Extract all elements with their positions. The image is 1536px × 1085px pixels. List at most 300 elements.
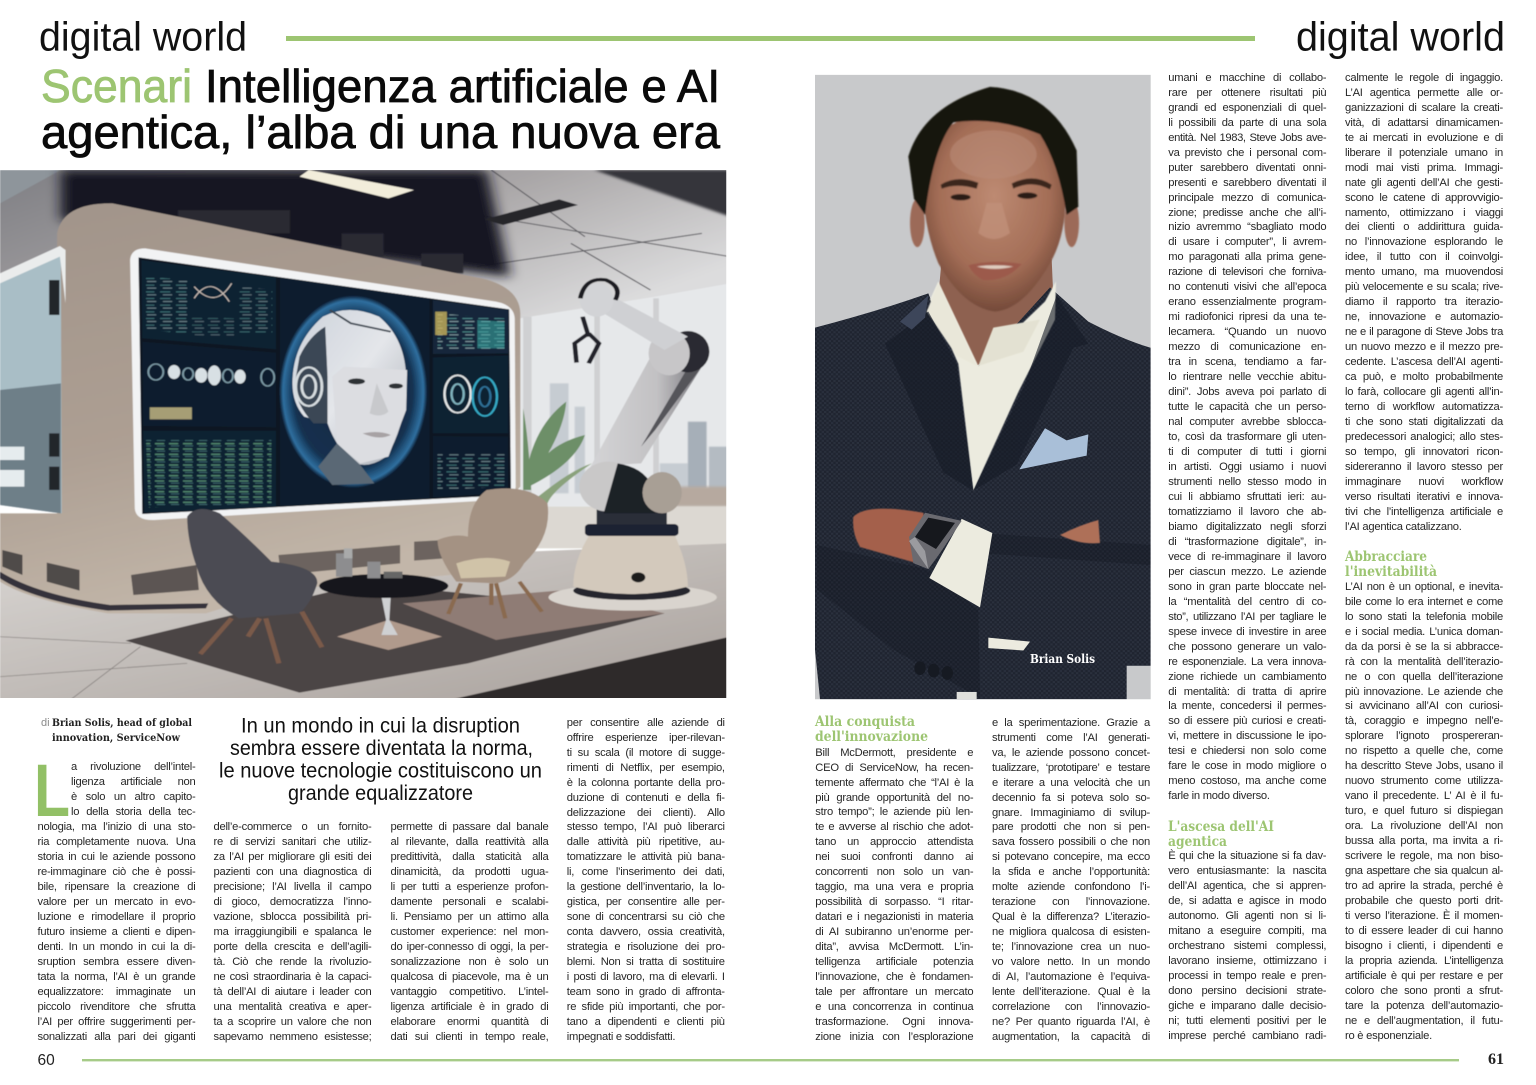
text block: column 8: ne e dell’augmentation, il futu- (1345, 1015, 1503, 1027)
text block: column 4: sone di concentrarsi su ciò che (567, 911, 725, 923)
text block: column 4: team sono in grado di affronta- (567, 986, 725, 998)
text block: column 8: so tempo, gli innovatori ricon- (1345, 446, 1503, 458)
text block: column 8: ca può, e molto probabilmente (1345, 371, 1503, 383)
green header rule (286, 36, 1255, 41)
text block: column 8: vano il precedente. L’ AI è il fu- (1345, 790, 1503, 802)
text block: column 1 intro: piccolo rivenditore che sfrutta (38, 1001, 196, 1013)
text block: column 1 intro: valore per un mercato in evo- (38, 896, 196, 908)
text block: column 7: spese invece di investire in aree (1168, 626, 1326, 638)
text block: column 4: delizzazione dei clienti). Allo (567, 806, 725, 818)
floor tile lines (0, 637, 187, 700)
text block: column 4: la gestione dell’inventario, la lo- (567, 881, 725, 893)
left hand (853, 509, 925, 563)
window with skyline (519, 283, 730, 547)
text block: column 7: fare le cose in modo migliore o (1168, 760, 1326, 772)
text block: column 6: vo valore netto. In un mondo (992, 956, 1150, 968)
screen glow frame (130, 248, 516, 520)
byline (41, 717, 192, 744)
text block: column 2: vazione, sblocca possibilità pri- (214, 911, 372, 923)
text block: column 7: in artisti. Oggi usiamo i nuovi (1168, 461, 1326, 473)
text block: column 7: farle in modo diverso. (1168, 790, 1270, 802)
text block: column 6: strumenti come l’AI generati- (992, 732, 1150, 744)
text block: column 7: ni; tutti elementi positivi per le (1168, 1015, 1326, 1027)
text block: column 7: giche e imparano dalle decisio- (1168, 1000, 1326, 1012)
text block: column 4: strategia e risoluzione dei pro- (567, 941, 725, 953)
unit base shadow and vents (0, 572, 208, 611)
text block: column 3 (390, 821, 549, 1043)
text block: column 1 intro: lo della storia della tec- (71, 806, 196, 818)
face (923, 112, 1066, 312)
eyes (951, 192, 1037, 200)
text block: column 1 intro: è solo un altro capito- (71, 791, 196, 803)
text block: column 2: di gioco, democratizza l’inno- (214, 896, 372, 908)
text block: column 8: probabile che questo porti drit- (1345, 895, 1503, 907)
text block: column 4: tano a dipendenti e clienti più (567, 1016, 725, 1028)
text block: column 3: ligenza artificiale è in grado di (390, 1001, 548, 1013)
text block: column 7: la “mentalità del centro di co- (1168, 596, 1326, 608)
text block: column 8: ora. La rivoluzione dell’AI non (1345, 820, 1503, 832)
text block: column 4: blemi. Non si tratta di sostituire (567, 956, 725, 968)
text block: column 6 (992, 717, 1150, 1043)
text block: column 8: gna aspettare che sia qualcun al- (1345, 865, 1503, 877)
drop cap: L (34, 749, 70, 832)
sleeve buttons (914, 661, 953, 680)
text block: column 7: sono in gran parte bloccate nel- (1168, 581, 1326, 593)
pocket square (1019, 428, 1088, 469)
text block: column 1 intro: nologia, ma l’inizio di una sto- (38, 821, 196, 833)
digital world heading left: digital world (39, 14, 247, 60)
text block: column 7: re esponenziale. La vera innova- (1168, 656, 1326, 668)
text block: column 1 intro: denti. In un mondo in cui la di- (38, 941, 196, 953)
section heading: Abbracciare l'inevitabilità (1344, 549, 1437, 580)
head group (908, 87, 1079, 312)
text block: column 4: stesso tempo, l’AI può liberarci (567, 821, 725, 833)
text block: column 2 (214, 821, 372, 1043)
text block: column 7: erano essenzialmente program- (1168, 296, 1326, 308)
text block: column 4: duzione di contenuti e della fi- (567, 792, 725, 804)
text block: column 4: offrire esperienze iper-rilevan- (567, 732, 725, 744)
screen data rows (146, 440, 271, 507)
mouth (968, 262, 1022, 280)
text block: column 4: è la colonna portante della pro- (567, 777, 725, 789)
text block: column 8: ti che sono stati digitalizzati da (1345, 416, 1503, 428)
text block: column 8: l’AI agentica catalizzano. (1345, 521, 1462, 533)
illustration: futuristic AI room with robot arm (0, 170, 726, 698)
lapels (885, 295, 1088, 491)
byline: di (41, 717, 50, 729)
text block: column 7: sto”, utilizzano l’AI per tagliare le (1168, 611, 1326, 623)
article title: Intelligenza artificiale e AI (205, 60, 720, 112)
text block: column 8: più velocemente e su scala; rive- (1345, 281, 1503, 293)
text block: column 6: correlazione con l’innovazio- (992, 1001, 1150, 1013)
text block: column 5 Alla conquista dell'innovazione: tano un approccio attendista (815, 836, 973, 848)
text block: column 8: dei clienti o addirittura guida- (1345, 221, 1503, 233)
text block: column 8: ne, innovazione e automazio- (1345, 311, 1503, 323)
text block: column 8: namento, ottimizzano i viaggi (1345, 207, 1503, 219)
text block: column 7: processi in tempo reale e pren- (1168, 970, 1326, 982)
text block: column 7: di mentalità: di tratta di aprire (1168, 686, 1326, 698)
text block: column 8: splorare l’ignoto prospereran- (1345, 730, 1503, 742)
text block: column 6: terazione con l’innovazione. (992, 896, 1150, 908)
text block: column 7: di “trasformazione digitale”, in- (1168, 536, 1326, 548)
text block: column 5 Alla conquista dell'innovazione: datari e i negazionisti in materia (815, 911, 973, 923)
text block: column 7: presenti e sarebbero diventati il (1168, 177, 1326, 189)
footer rule (82, 1059, 1459, 1061)
text block: column 8: no rispetto a quelle che, come (1345, 745, 1503, 757)
text block: column 7: rare per ottenere risultati più (1168, 87, 1326, 99)
text block: column 6: lente dell’iterazione. Qual è la (992, 986, 1150, 998)
text block: column 4: impegnati e soddisfatti. (567, 1031, 675, 1043)
floor (0, 543, 730, 700)
text block: column 7: mitano a eseguire compiti, ma (1168, 925, 1326, 937)
text block: column 8: turo, e quel futuro si dispiegan (1345, 805, 1503, 817)
text block: column 5 Alla conquista dell'innovazione: e una concorrenza in continua (815, 1001, 973, 1013)
suit (815, 287, 1151, 699)
text block: column 5 Alla conquista dell'innovazione: l’innovazione, che è fondamen- (815, 971, 973, 983)
text block: column 5 Alla conquista dell'innovazione: zione inizia con l’esplorazione (815, 1031, 973, 1043)
text block: column 8: ha descritto Steve Jobs, usano il (1345, 760, 1503, 772)
text block: column 7: entità. Nel 1983, Steve Jobs ave- (1168, 132, 1326, 144)
text block: column 8: idee, il tutto con il coinvolgi- (1345, 251, 1503, 263)
text block: column 7: biamo digitalizzato negli sforzi (1168, 521, 1326, 533)
text block: column 7: lecamera. “Quando un nuovo (1168, 326, 1326, 338)
text block: column 7: nal computer avrebbe sblocca- (1168, 416, 1326, 428)
text block: column 4: li, come l’inserimento dei dati, (567, 866, 725, 878)
pull quote: In un mondo in cui la disruption (241, 714, 520, 738)
text block: column 7: mo paragonati alla prima gene- (1168, 251, 1326, 263)
text block: column 7: per ciascun mezzo. Le aziende (1168, 566, 1326, 578)
section heading: L'ascesa dell'AI agentica: agentica (1168, 834, 1227, 850)
text block: column 7: vero entusiasmante: la nascita (1168, 865, 1326, 877)
shirt (927, 281, 1056, 491)
text block: column 1 intro: a rivoluzione dell’intel- (71, 761, 196, 773)
text block: column 1 intro: re-immaginare ciò che è possi- (38, 866, 196, 878)
text block: column 8: la propria azienda. L’intelligenza (1345, 955, 1503, 967)
unit body (0, 203, 520, 613)
text block: column 7: vi, mettere in discussione le ipo- (1168, 730, 1326, 742)
text block: column 8: tà, coraggio e impegno nell’e- (1345, 715, 1503, 727)
text block: column 8: un nuovo mezzo e il mezzo pre- (1345, 341, 1503, 353)
text block: column 3: dati sui clienti in tempo reale, (390, 1031, 548, 1043)
section heading: Abbracciare l'inevitabilità: Abbracciare (1344, 549, 1427, 565)
text block: column 8: nate gli agenti dell’AI che gesti- (1345, 177, 1503, 189)
text block: column 4: i posti di lavoro, ma di elevarli. I (567, 971, 725, 983)
text block: column 7: lo rientrare nelle vecchie abitu- (1168, 371, 1326, 383)
text block: column 5 Alla conquista dell'innovazione: Bill McDermott, presidente e (815, 747, 973, 759)
article title (41, 60, 720, 158)
text block: column 6: decennio fa si poteva solo so- (992, 792, 1150, 804)
text block: column 6: ne migliora qualcosa di esisten- (992, 926, 1150, 938)
beige armchair (438, 488, 548, 618)
text block: column 5 Alla conquista dell'innovazione: temente affermato che “l’AI è la (815, 777, 973, 789)
text block: column 6: sava fossero possibili o che non (992, 836, 1150, 848)
text block: column 7: dell’AI agentica, che si appren- (1168, 880, 1326, 892)
text block: column 1 intro: ligenza artificiale non (71, 776, 196, 788)
text block: column 1 intro: luzione e rimodellare il proprio (38, 911, 196, 923)
text block: column 8: si avvicinano all’AI con curiosi- (1345, 700, 1503, 712)
text block: column 8: da da porsi è se la si abbracce- (1345, 641, 1503, 653)
text block: column 7: tesi e chiedersi non solo come (1168, 745, 1326, 757)
text block: column 8: scono le catene di approvvigio- (1345, 192, 1503, 204)
text block: column 7: vece di re-immaginare il lavoro (1168, 551, 1326, 563)
dark shadow above unit (61, 170, 510, 277)
text block: column 3: dinamicità, da prodotti ugua- (390, 866, 548, 878)
text block: column 2: tà dell’AI di aiutare i leader con (214, 986, 372, 998)
neck (937, 259, 1055, 368)
section heading: L'ascesa dell'AI agentica: L'ascesa dell'AI (1168, 819, 1274, 835)
text block: column 5 Alla conquista dell'innovazione: di AI subiranno un’enorme per- (815, 926, 973, 938)
text block: column 8: ne e il paragone di Steve Jobs tra (1345, 326, 1503, 338)
text block: column 2: tà. Ciò che rende la rivoluzio- (214, 956, 372, 968)
text block: column 3: qualcosa di piacevole, ma è un (390, 971, 548, 983)
text block: column 3: permette di passare dal banale (390, 821, 548, 833)
text block: column 6: e la sperimentazione. Grazie a (992, 717, 1150, 729)
text block: column 5 Alla conquista dell'innovazione: nei suoi confronti danno ai (815, 851, 973, 863)
text block: column 8: ne o con quella dell’iterazione (1345, 671, 1503, 683)
text block: column 6: di AI, l’automazione è l’equiva- (992, 971, 1150, 983)
pull quote: grande equalizzatore (288, 781, 473, 805)
text block: column 2: precisione; l’AI livella il campo (214, 881, 372, 893)
text block: column 7: orchestrano sistemi complessi, (1168, 940, 1326, 952)
ceiling light (299, 170, 414, 198)
text block: column 6: pare prodotti che non si pen- (992, 821, 1150, 833)
text block: column 6: ne? Per quanto riguarda l’AI, è (992, 1016, 1150, 1028)
section heading: Abbracciare l'inevitabilità: l'inevitabilità (1345, 564, 1437, 580)
text block: column 7: tutte le capacità che un perso- (1168, 401, 1326, 413)
portrait photo of Brian Solis (815, 74, 1151, 700)
text block: column 8: cedente. L’ascesa dell’AI agenti- (1345, 356, 1503, 368)
text block: column 3: vantaggio competitivo. L’intel- (390, 986, 548, 998)
text block: column 7: razione di televisori che forniva- (1168, 266, 1326, 278)
text block: column 8: modi mai visti prima. Immagi- (1345, 162, 1503, 174)
article title: Scenari (41, 60, 192, 112)
plant (523, 402, 592, 503)
text block: column 8: vità, di adattarsi dinamicamen- (1345, 117, 1503, 129)
text block: column 4: rimenti di Netflix, per esempio, (567, 762, 725, 774)
text block: column 7: no contenuti visivi che all’epoca (1168, 281, 1326, 293)
portrait caption: Brian Solis (1030, 652, 1095, 666)
ceiling vent (484, 199, 578, 225)
text block: column 5 Alla conquista dell'innovazione: CEO di ServiceNow, ha recen- (815, 762, 973, 774)
text block: column 6: te; l’innovazione crea un nuo- (992, 941, 1150, 953)
text block: column 8: lo farà, collocare gli agenti all’in- (1345, 386, 1503, 398)
text block: column 2: ma irraggiungibili e spalanca le (214, 926, 372, 938)
text block: column 2: ta a scoprire un valore che non (214, 1016, 372, 1028)
section heading: L'ascesa dell'AI agentica (1168, 819, 1274, 850)
text block: column 7: umani e macchine di collabo- (1168, 72, 1326, 84)
text block: column 5 Alla conquista dell'innovazione: possibilità di sorpasso. “I ritar- (815, 896, 973, 908)
right hand (1060, 520, 1100, 543)
text block: column 8: predecessori analogici; allo stes- (1345, 431, 1503, 443)
text block: column 7: tra in scena, tendiamo a far- (1168, 356, 1326, 368)
byline: Brian Solis, head of global (52, 717, 192, 729)
ears (910, 199, 1079, 247)
text block: column 7: to, così da trasformare gli uten- (1168, 431, 1326, 443)
text block: column 8: sidereranno il lavoro stesso per (1345, 461, 1503, 473)
text block: column 8: tivi che l’intelligenza artificiale e (1345, 506, 1503, 518)
text block: column 4 (566, 717, 725, 1043)
text block: column 2: porte della crescita e dell’agili- (214, 941, 372, 953)
robot arm (548, 280, 717, 611)
text block: column 7: strumenti nello stesso modo in (1168, 476, 1326, 488)
text block: column 7: tomatizziamo il lavoro che ab- (1168, 506, 1326, 518)
text block: column 7: zione; predisse anche che all’i- (1168, 207, 1326, 219)
text block: column 6: va, le aziende possono concet- (992, 747, 1150, 759)
text block: column 7: li possibili da parte di una sola (1168, 117, 1326, 129)
left glass wing (0, 253, 62, 513)
text block: column 8: scrivere le regole, ma non biso- (1345, 850, 1503, 862)
text block: column 6: augmentation, la capacità di (992, 1031, 1150, 1043)
text block: column 7: ti di computer di tutti i giorni (1168, 446, 1326, 458)
text block: column 8: e i social media. L’unica doman- (1345, 626, 1503, 638)
text block: column 7 (1168, 72, 1327, 1042)
text block: column 8: bisogno i clienti, i dipendenti e (1345, 940, 1503, 952)
text block: column 8: no l’innovazione esplorando le (1345, 236, 1503, 248)
text block: column 8: ti verso l’iterazione. È il momen- (1345, 910, 1503, 922)
text block: column 7: cui li abbiamo sfruttati ieri: au- (1168, 491, 1326, 503)
text block: column 2: una mentalità creativa e aper- (214, 1001, 372, 1013)
text block: column 1 intro: storia in cui le aziende possono (38, 851, 196, 863)
text block: column 7: dini”. Jobs aveva poi parlato di (1168, 386, 1326, 398)
wrist watch (909, 513, 962, 569)
text block: column 5 Alla conquista dell'innovazione: telligenza artificiale potenzia (815, 956, 973, 968)
text block: column 5 Alla conquista dell'innovazione: tale per affrontare un mercato (815, 986, 973, 998)
text block: column 8: terno di workflow automatizza- (1345, 401, 1503, 413)
text block: column 6: la sfida e anche l’opportunità: (992, 866, 1150, 878)
text block: column 4: tomatizzare le attività più bana- (567, 851, 725, 863)
text block: column 6: si potevano concepire, ma ecco (992, 851, 1150, 863)
pull quote: sembra essere diventata la norma, (230, 736, 533, 760)
text block: column 7: dono persino decisioni strate- (1168, 985, 1326, 997)
text block: column 8: ganizzazioni di scalare la creati- (1345, 102, 1503, 114)
text block: column 7: zione richiede un cambiamento (1168, 671, 1326, 683)
text block: column 2: re di servizi sanitari che utiliz- (214, 836, 372, 848)
dark armchair (187, 509, 322, 663)
text block: column 2: dell’e-commerce o un fornito- (214, 821, 372, 833)
photo background (813, 73, 1152, 701)
text block: column 5 Alla conquista dell'innovazione: stro tempo”; le aziende più len- (815, 806, 973, 818)
text block: column 8: nuovo strumento come utilizza- (1345, 775, 1503, 787)
text block: column 7: nizio avremmo “sbagliato modo (1168, 221, 1326, 233)
text block: column 1 intro: equalizzatore: immaginate un (38, 986, 196, 998)
text block: column 8: liberare il potenziale umano in (1345, 147, 1503, 159)
pull quote (219, 714, 542, 805)
section heading: Alla conquista dell'innovazione: Alla conquista (814, 714, 915, 730)
text block: column 8: L’AI agentica permette alle or- (1345, 87, 1503, 99)
text block: column 1 intro (38, 761, 196, 1043)
right panel ring dials (445, 375, 497, 416)
text block: column 3: elaborare enormi quantità di (390, 1016, 548, 1028)
text block: column 8: bussa alla porta, ma invita a ri- (1345, 835, 1503, 847)
text block: column 8: mento umano, ma muovendosi (1345, 266, 1503, 278)
text block: column 2: za l’AI per migliorare gli esiti dei (214, 851, 372, 863)
text block: column 3: al rilevante, dalla reattività alla (390, 836, 548, 848)
text block: column 8: to di essere leader di cui hanno (1345, 925, 1503, 937)
page number 60: 60 (38, 1052, 55, 1069)
text block: column 7: mezzo di comunicazione en- (1168, 341, 1326, 353)
text block: column 5 Alla conquista dell'innovazione: dita”, avvisa McDermott. L’in- (815, 941, 973, 953)
coffee table with objects (319, 548, 448, 635)
text block: column 8: tare la potenza dell’automazio- (1345, 1000, 1503, 1012)
text block: column 8: più innovazione. Le aziende che (1345, 686, 1503, 698)
text block: column 5 Alla conquista dell'innovazione: te e avverse al rischio che adot- (815, 821, 973, 833)
text block: column 1 intro: ria completamente nuova. Una (38, 836, 196, 848)
text block: column 8: diamo il rapporto tra iterazio- (1345, 296, 1503, 308)
text block: column 6: e iterare a una velocità che un (992, 777, 1150, 789)
text block: column 5 Alla conquista dell'innovazione: concorrenti non solo un van- (815, 866, 973, 878)
text block: column 4: ti su scala (il motore di sugge- (567, 747, 725, 759)
text block: column 6: tualizzare, ‘prototipare’ e testare (992, 762, 1150, 774)
ceiling (0, 170, 730, 330)
text block: column 7: so di essere più curiosi e creati- (1168, 715, 1326, 727)
text block: column 1 intro: l’AI per offrire suggerimenti per- (38, 1016, 196, 1028)
text block: column 8 (1345, 72, 1504, 1042)
text block: column 8: lo sono stati la telefonia mobile (1345, 611, 1503, 623)
text block: column 5 Alla conquista dell'innovazione: taggio, ma una vera e propria (815, 881, 973, 893)
text block: column 7: puter sarebbero diventati onni- (1168, 162, 1326, 174)
text block: column 7: va previsto che i personal com- (1168, 147, 1326, 159)
digital world heading right: digital world (1296, 14, 1505, 60)
text block: column 3: customer experience: nel mon- (390, 926, 548, 938)
robot head hologram (279, 296, 427, 488)
text block: column 4: gistica, per consentire alle per- (567, 896, 725, 908)
text block: column 7: meno costoso, ma anche come (1168, 775, 1326, 787)
text block: column 7: principale mezzo di comunica- (1168, 192, 1326, 204)
text block: column 1 intro: sruption sembra essere diven- (38, 956, 196, 968)
text block: column 3: do iper-connesso di oggi, la per- (390, 941, 548, 953)
text block: column 2: pazienti con una diagnostica di (214, 866, 372, 878)
text block: column 7: grandi ed esponenziali di quel- (1168, 102, 1326, 114)
article title: agentica, l’alba di una nuova era (41, 106, 720, 158)
hair (908, 87, 1078, 215)
text block: column 7: di usare i computer”, li avrem- (1168, 236, 1326, 248)
text block: column 7: imprese perché cambiano radi- (1168, 1030, 1326, 1042)
text block: column 3: damente personali e scalabi- (390, 896, 548, 908)
sleeve shadows (817, 533, 1151, 698)
text block: column 4: conta davvero, ossia creatività, (567, 926, 725, 938)
text block: column 1 intro: sonalizzati alla pari dei giganti (38, 1031, 196, 1043)
text block: column 1 intro: bile, ripensare la creazione di (38, 881, 196, 893)
text block: column 7: de, si adatta e agisce in modo (1168, 895, 1326, 907)
rug (125, 583, 664, 693)
text block: column 8: ro è esponenziale. (1345, 1030, 1432, 1042)
text block: column 5 Alla conquista dell'innovazione (815, 747, 974, 1043)
pull quote: le nuove tecnologie costituiscono un (219, 758, 542, 782)
text block: column 7: che possono generare un valo- (1168, 641, 1326, 653)
byline: innovation, ServiceNow (52, 732, 181, 744)
text block: column 5 Alla conquista dell'innovazione: trasformazione. Ogni innova- (815, 1016, 973, 1028)
lower cuff (988, 638, 1030, 650)
text block: column 7: È qui che la situazione si fa dav- (1168, 850, 1326, 862)
text block: column 3: sonalizzazione non è solo un (390, 956, 548, 968)
text block: column 4: dalle attività più ripetitive, au- (567, 836, 725, 848)
text block: column 5 Alla conquista dell'innovazione: più grande opportunità del no- (815, 792, 973, 804)
text block: column 7: lavorano insieme, ottimizzano i (1168, 955, 1326, 967)
text block: column 4: per consentire alle aziende di (567, 717, 725, 729)
text block: column 8: tro ad aprire la strada, perché è (1345, 880, 1503, 892)
section heading: Alla conquista dell'innovazione (814, 714, 928, 745)
text block: column 8: L’AI non è un optional, e inevita- (1345, 581, 1503, 593)
shirt cuff (929, 519, 992, 607)
text block: column 8: immaginare nuovi workflow (1345, 476, 1503, 488)
eyebrows (941, 178, 1052, 190)
nose (978, 203, 1010, 239)
text block: column 2: sapevamo nemmeno esistesse; (214, 1031, 372, 1043)
text block: column 8: calmente le regole di ingaggio. (1345, 72, 1503, 84)
text block: column 3: predittività, dalla staticità alla (390, 851, 548, 863)
text block: column 1 intro: tata la norma, l’AI è un grande (38, 971, 196, 983)
text block: column 6: molte aziende confondono l’i- (992, 881, 1150, 893)
